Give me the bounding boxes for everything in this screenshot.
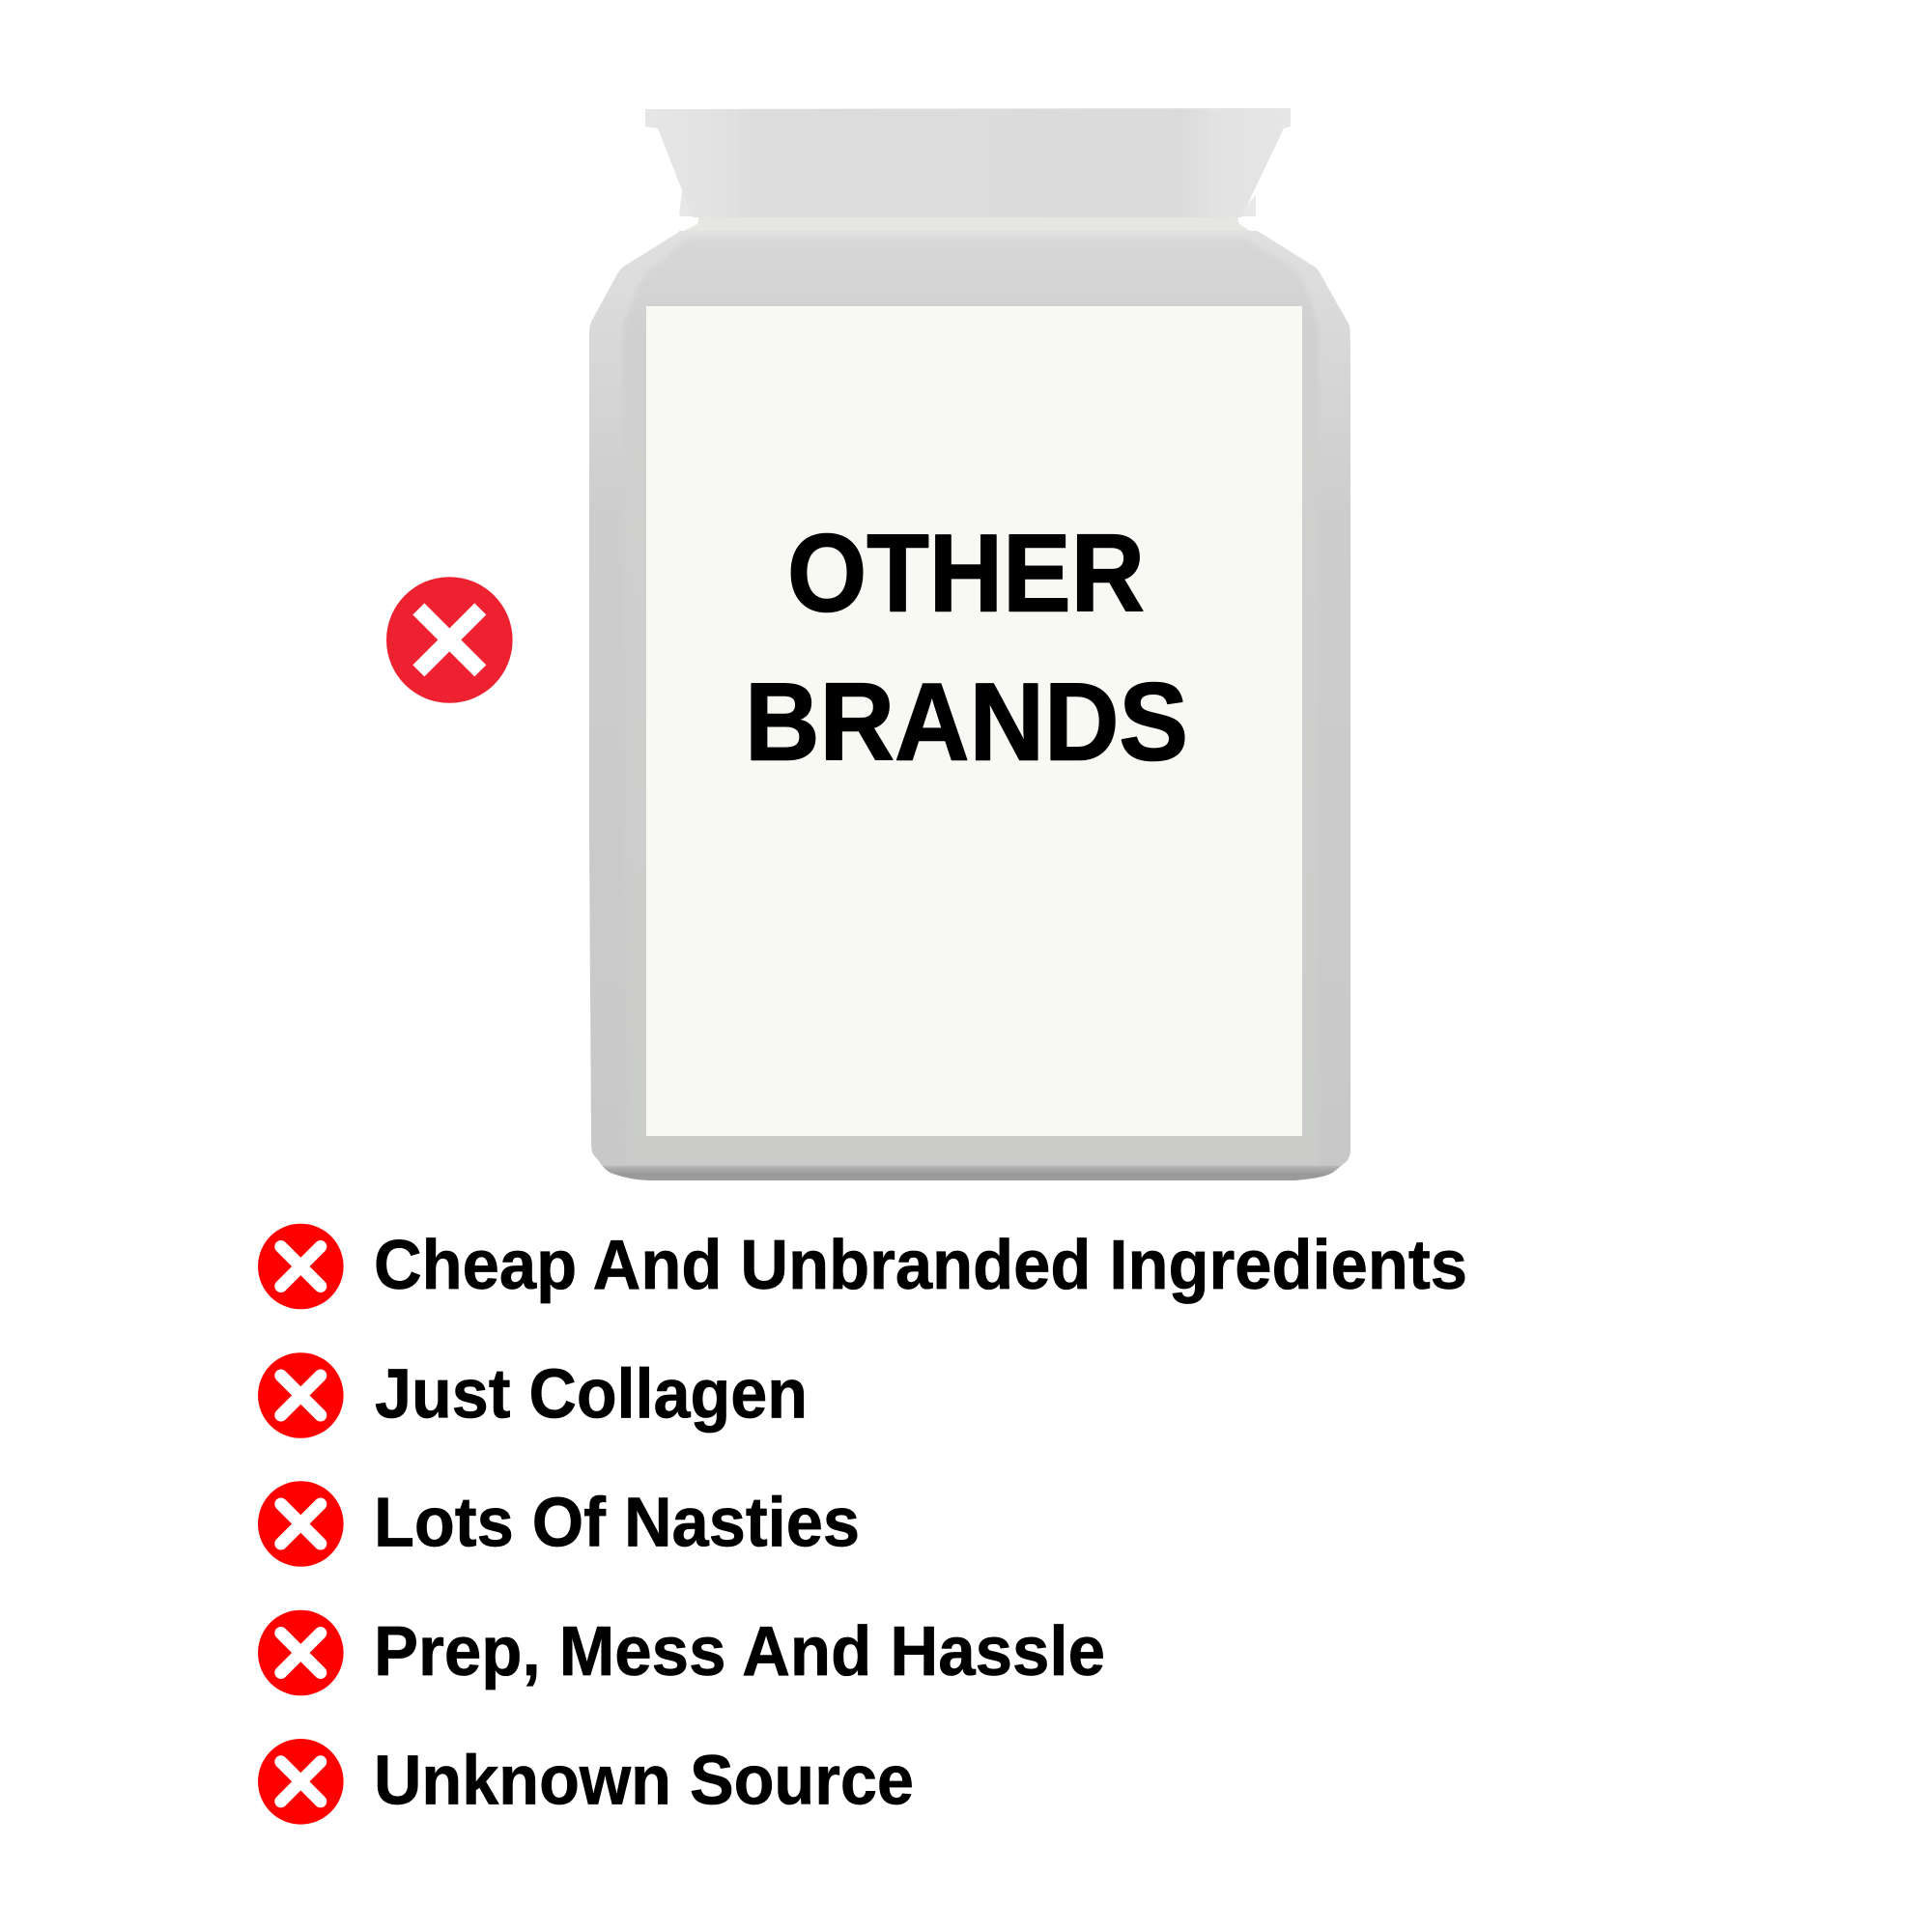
icon: red cross — [258, 1481, 344, 1567]
label heading: brands: BRANDS — [745, 662, 1188, 784]
list text: Cheap And Unbranded Ingredients — [374, 1227, 1467, 1304]
list text: Lots Of Nasties — [374, 1484, 860, 1561]
icon: large red cross — [386, 577, 513, 703]
bottle neck — [682, 214, 1252, 232]
list item: just collagen — [258, 1352, 808, 1438]
list item: cheap and unbranded ingredients — [258, 1224, 1467, 1309]
list item: unknown source — [258, 1739, 914, 1825]
icon: red cross — [258, 1352, 344, 1438]
list text: Just Collagen — [375, 1355, 808, 1433]
list text: Unknown Source — [374, 1743, 914, 1820]
bottle cap side wings — [679, 184, 1256, 216]
bottle base shading — [603, 1165, 1341, 1180]
icon: red cross — [258, 1739, 344, 1825]
product bottle — [580, 108, 1362, 1183]
bottle label — [646, 306, 1302, 1136]
bottle cap — [645, 108, 1291, 217]
bottle body — [589, 231, 1350, 1180]
icon: red cross — [258, 1610, 344, 1695]
list text: Prep, Mess And Hassle — [374, 1613, 1105, 1690]
icon: red cross — [258, 1224, 344, 1309]
bottle front face — [626, 242, 1316, 344]
list item: prep, mess and hassle — [258, 1610, 1105, 1695]
label heading: other: OTHER — [787, 513, 1145, 636]
list item: lots of nasties — [258, 1481, 860, 1567]
